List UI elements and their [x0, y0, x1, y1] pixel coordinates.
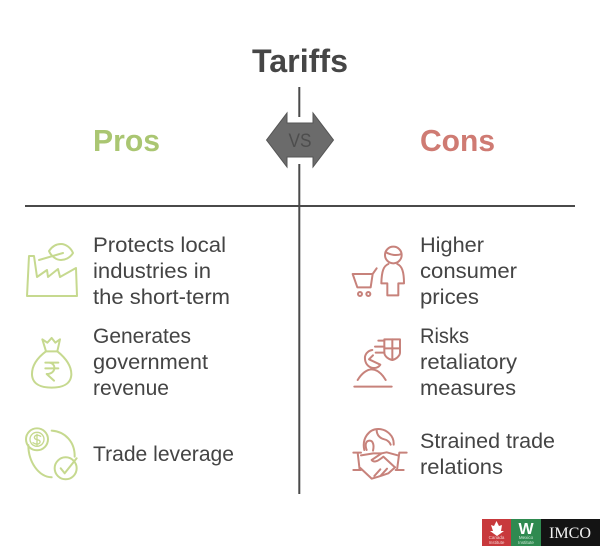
logo: mexico institute: Institute	[518, 540, 534, 545]
text: risks retaliatory measures: Risks	[420, 325, 469, 348]
icon: money bag with rupee	[32, 338, 71, 388]
text: higher consumer prices: prices	[420, 286, 479, 309]
text: protects local industries: industries in	[93, 260, 211, 283]
text: risks retaliatory measures: measures	[420, 377, 516, 400]
text: protects local industries: the short-term	[93, 286, 230, 309]
text: strained trade relations: Strained trade	[420, 430, 555, 453]
icon: globe and handshake	[353, 429, 407, 479]
text: higher consumer prices: Higher	[420, 234, 484, 257]
text: higher consumer prices	[420, 234, 517, 309]
vertical divider and horizontal divider	[25, 87, 575, 494]
text: risks retaliatory measures: retaliatory	[420, 351, 518, 374]
logo: mexico institute: W	[518, 521, 534, 538]
text: risks retaliatory measures	[420, 325, 518, 400]
heading: cons: Cons	[420, 123, 495, 158]
text: protects local industries: Protects local	[93, 234, 226, 257]
icon: person facing globe, retaliation	[354, 339, 400, 387]
logo: canada institute	[482, 519, 511, 546]
panel: pros list	[26, 234, 234, 479]
title: Tariffs	[252, 43, 348, 79]
icon: shopper with cart	[353, 247, 404, 296]
logo: canada institute: Institute	[489, 540, 505, 545]
text: strained trade relations	[420, 430, 555, 479]
text: trade leverage: Trade leverage	[93, 443, 234, 466]
vs double arrow badge	[266, 113, 334, 167]
logo: mexico institute: Mexico	[519, 535, 534, 540]
text: higher consumer prices: consumer	[420, 260, 517, 283]
logo: imco: IMCO	[549, 525, 591, 542]
vs double arrow badge: VS	[288, 131, 312, 152]
logos strip	[482, 519, 600, 546]
text: generates government revenue: Generates	[93, 325, 191, 348]
text: generates government revenue	[93, 325, 208, 400]
text: generates government revenue: government	[93, 351, 208, 374]
icon: factory with leaf	[27, 244, 77, 296]
text: protects local industries	[93, 234, 230, 309]
logo: mexico institute	[511, 519, 541, 546]
heading: pros: Pros	[93, 123, 160, 158]
text: strained trade relations: relations	[420, 456, 503, 479]
text: generates government revenue: revenue	[93, 377, 169, 400]
logo: canada institute: Canada	[489, 535, 505, 540]
icon: coin and check cycle	[26, 428, 77, 479]
panel: cons list	[353, 234, 555, 479]
